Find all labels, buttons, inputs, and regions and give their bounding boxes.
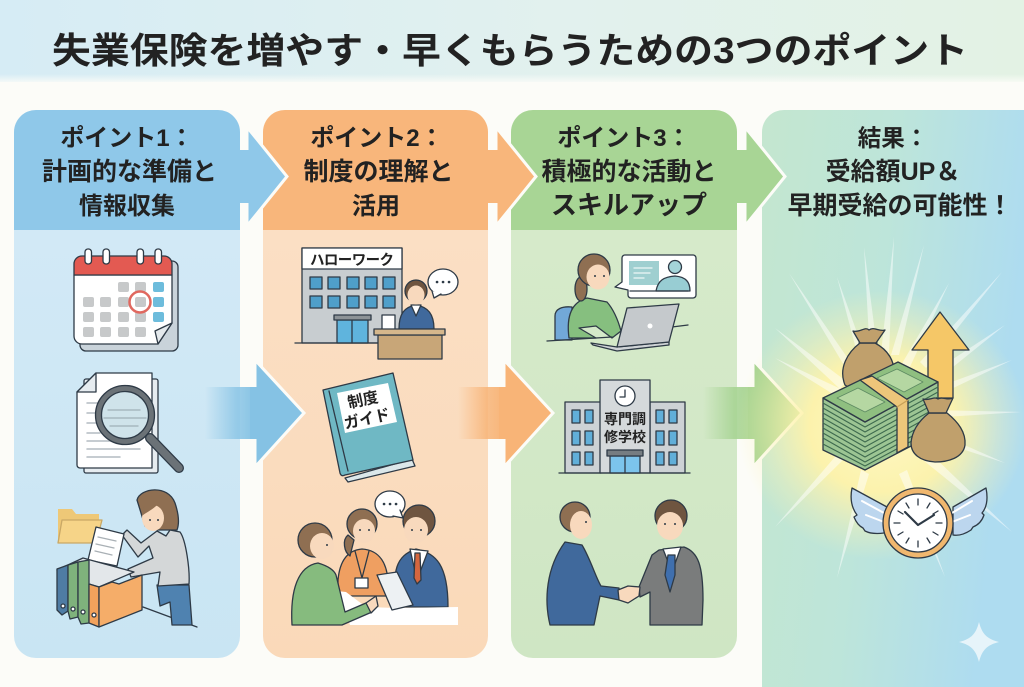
panel: point 3 (511, 110, 737, 658)
flow arrow 3 (703, 360, 802, 467)
heading: point 2: 制度の理解と (303, 158, 454, 186)
heading: point 3 (541, 125, 717, 220)
icon: stack of money (823, 362, 938, 470)
icon: rising arrow (912, 312, 969, 398)
icon: vocational school building: 専門調 (604, 411, 646, 427)
heading: result (787, 125, 1013, 220)
icon: vocational school building: 修学校 (604, 429, 646, 445)
heading: point 2: ポイント2： (310, 125, 444, 152)
heading: point 2 (303, 125, 454, 220)
heading: point 1: 計画的な準備と (42, 158, 217, 186)
icon: hello work office: ハローワーク (310, 252, 394, 269)
icon: back money bag (843, 329, 894, 395)
heading: result: 早期受給の可能性！ (787, 192, 1013, 220)
icon: system guide book: 制度 (346, 387, 380, 412)
icon: winged clock (851, 488, 987, 558)
heading: point 2: 活用 (352, 193, 400, 220)
heading: point 1 (42, 125, 217, 220)
icon: calendar (74, 249, 178, 351)
flow arrow 1 (205, 360, 304, 467)
icon: document and magnifier (77, 373, 179, 473)
glow and rays (737, 237, 1024, 578)
panel: result (762, 110, 1024, 687)
icon: system guide book: ガイド (342, 405, 392, 433)
title: 失業保険を増やす・早くもらうための3つのポイント (52, 30, 968, 71)
heading: result: 受給額UP＆ (826, 158, 960, 186)
icon: woman studying online (547, 254, 696, 351)
title band (0, 0, 1024, 84)
flow arrow 2 (458, 360, 553, 467)
heading: point 1: ポイント1： (60, 125, 194, 152)
icon: vocational school building (559, 380, 690, 473)
icon: handshake of two businessmen (547, 500, 703, 625)
heading: result: 結果： (858, 125, 928, 151)
header arrow 2 (487, 127, 536, 226)
heading: point 3: 積極的な活動と (541, 158, 717, 186)
header arrow 1 (238, 127, 287, 226)
icon: three people in consultation (292, 491, 458, 625)
panel: point 1 (14, 110, 240, 658)
heading: point 3: スキルアップ (551, 190, 707, 220)
icon: sparkle (959, 622, 999, 662)
header arrow 3 (736, 127, 785, 226)
heading: point 3: ポイント3： (557, 125, 691, 152)
heading: point 1: 情報収集 (79, 193, 175, 220)
panel: point 2 (263, 110, 488, 658)
icon: system guide book (323, 373, 415, 482)
icon: front money bag (911, 398, 965, 462)
icon: hello work office (295, 248, 458, 359)
icon: person filing documents (57, 490, 197, 627)
